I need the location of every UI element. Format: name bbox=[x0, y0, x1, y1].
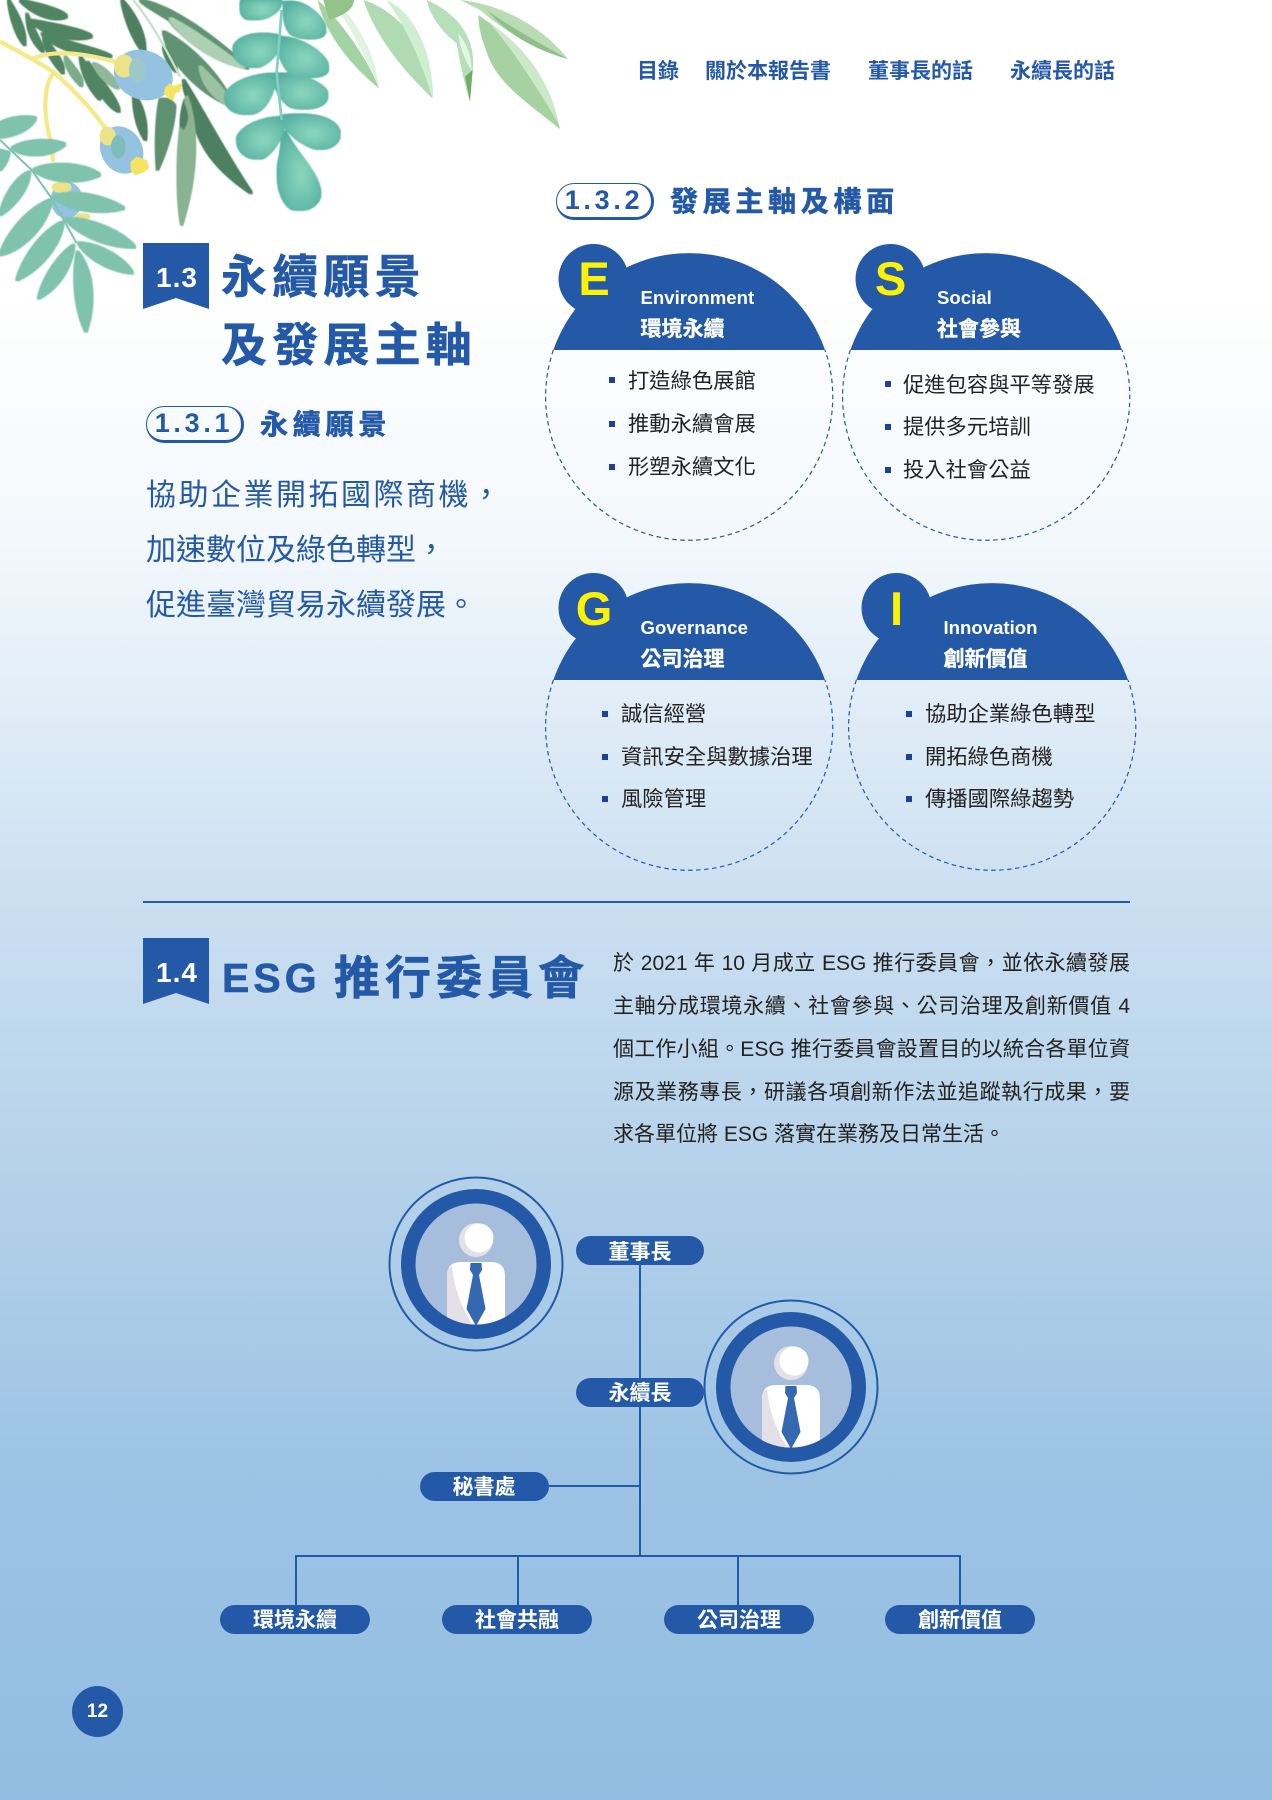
subheading: 永續願景: 永續願景 bbox=[260, 409, 391, 440]
node: 公司治理: 公司治理 bbox=[697, 1609, 781, 1632]
berries bbox=[107, 42, 180, 108]
letter: G: G bbox=[576, 582, 612, 635]
panel: Innovation: 傳播國際綠趨勢 bbox=[925, 787, 1074, 811]
node: 董事長: 董事長 bbox=[608, 1240, 672, 1264]
navigation: top menu: 目錄 bbox=[637, 60, 679, 83]
letter: E: E bbox=[578, 252, 610, 305]
text block: vision statement: 促進臺灣貿易永續發展。 bbox=[146, 589, 476, 622]
subheading: 發展主軸及構面: 發展主軸及構面 bbox=[670, 186, 899, 217]
letter: S: S bbox=[875, 252, 906, 305]
panel: Environment bbox=[545, 244, 834, 541]
panel: Governance: 誠信經營 bbox=[621, 702, 706, 726]
text block: vision statement bbox=[146, 479, 504, 622]
node: 社會共融: 社會共融 bbox=[475, 1608, 559, 1632]
page number bbox=[72, 1686, 123, 1737]
panel: Environment: 打造綠色展館 bbox=[628, 369, 756, 393]
text block: committee description: 個工作小組。ESG 推行委員會設置目的以統合各單位資 bbox=[613, 1038, 1130, 1061]
node: 社會共融 bbox=[442, 1605, 592, 1634]
panel: Governance bbox=[545, 573, 834, 871]
node: 環境永續: 環境永續 bbox=[253, 1609, 337, 1632]
panel: Social: 提供多元培訓 bbox=[903, 415, 1031, 439]
label: 社會參與: 社會參與 bbox=[937, 318, 1021, 341]
node: 秘書處 bbox=[420, 1472, 549, 1501]
icon: CSO portrait bbox=[704, 1300, 878, 1474]
panel: Environment: 推動永續會展 bbox=[628, 412, 756, 436]
navigation: top menu: 董事長的話 bbox=[868, 60, 973, 83]
page number: 12 bbox=[87, 1701, 108, 1722]
text block: committee description: 源及業務專長，研議各項創新作法並追蹤執行成果，要 bbox=[613, 1081, 1130, 1104]
node: 董事長 bbox=[576, 1236, 704, 1265]
right light green leaves bbox=[318, 0, 433, 98]
text block: committee description bbox=[613, 952, 1130, 1146]
panel: Innovation bbox=[848, 573, 1136, 871]
text block: committee description: 求各單位將 ESG 落實在業務及日常生活。 bbox=[613, 1123, 1005, 1146]
badge: section 1.4 bbox=[143, 938, 209, 1004]
yellow stems bbox=[0, 42, 115, 162]
badge: section 1.3: 1.3 bbox=[156, 262, 198, 293]
panel: Innovation: 開拓綠色商機 bbox=[925, 745, 1053, 769]
navigation: top menu bbox=[637, 60, 1115, 83]
node: 永續長: 永續長 bbox=[608, 1382, 672, 1405]
label: Governance: Governance bbox=[640, 617, 748, 638]
node: 永續長 bbox=[576, 1378, 704, 1407]
badge: section 1.4: 1.4 bbox=[156, 957, 198, 988]
text block: committee description: 主軸分成環境永續、社會參與、公司治理及創新價值 4 bbox=[613, 995, 1130, 1018]
text block: committee description: 於 2021 年 10 月成立 ESG 推行委員會，並依永續發展 bbox=[613, 952, 1130, 975]
label: Environment: Environment bbox=[640, 287, 754, 308]
node: 秘書處: 秘書處 bbox=[452, 1476, 516, 1499]
label: 公司治理: 公司治理 bbox=[640, 648, 724, 671]
navigation: top menu: 永續長的話 bbox=[1010, 60, 1115, 83]
letter: I: I bbox=[890, 582, 903, 635]
node: 環境永續 bbox=[220, 1605, 370, 1634]
teal leaves bbox=[227, 0, 338, 209]
node: 創新價值 bbox=[885, 1605, 1035, 1634]
heading: section 1.3 title: 及發展主軸 bbox=[221, 319, 477, 371]
illustration: watercolor leaves and berries bbox=[0, 0, 568, 334]
subheading badge: 1.3.2: 1.3.2 bbox=[565, 185, 643, 215]
panel: Social: 投入社會公益 bbox=[903, 458, 1031, 482]
panel: Social bbox=[842, 244, 1130, 541]
lower teal fern bbox=[0, 117, 135, 332]
heading: section 1.3 title bbox=[221, 251, 477, 371]
heading: ESG 推行委員會 bbox=[222, 952, 589, 1004]
panel: Governance: 風險管理 bbox=[621, 787, 706, 811]
panel: Governance: 資訊安全與數據治理 bbox=[621, 745, 813, 769]
badge: section 1.3 bbox=[143, 243, 209, 309]
node: 創新價值: 創新價值 bbox=[918, 1608, 1002, 1632]
label: Social: Social bbox=[937, 287, 992, 308]
text block: vision statement: 協助企業開拓國際商機， bbox=[146, 479, 504, 512]
panel: Innovation: 協助企業綠色轉型 bbox=[925, 702, 1095, 726]
panel: Social: 促進包容與平等發展 bbox=[903, 373, 1095, 397]
node: 公司治理 bbox=[664, 1605, 814, 1634]
panel: Environment: 形塑永續文化 bbox=[628, 455, 756, 479]
label: 環境永續: 環境永續 bbox=[640, 318, 724, 341]
subheading badge: 1.3.1 bbox=[146, 406, 244, 443]
icon: chairman portrait bbox=[390, 1178, 562, 1350]
label: Innovation: Innovation bbox=[944, 617, 1038, 638]
subheading badge: 1.3.1: 1.3.1 bbox=[155, 408, 233, 438]
org chart: ESG committee structure bbox=[220, 1176, 1035, 1634]
heading: ESG 推行委員會: 推行委員會 bbox=[334, 952, 589, 1004]
dark fern and long leaves bbox=[0, 0, 252, 225]
heading: section 1.3 title: 永續願景 bbox=[221, 251, 426, 303]
navigation: top menu: 關於本報告書 bbox=[705, 60, 831, 83]
label: 創新價值: 創新價值 bbox=[944, 648, 1028, 671]
subheading badge: 1.3.2 bbox=[556, 183, 654, 220]
heading: ESG 推行委員會: ESG bbox=[222, 955, 321, 1001]
text block: vision statement: 加速數位及綠色轉型， bbox=[146, 534, 446, 567]
